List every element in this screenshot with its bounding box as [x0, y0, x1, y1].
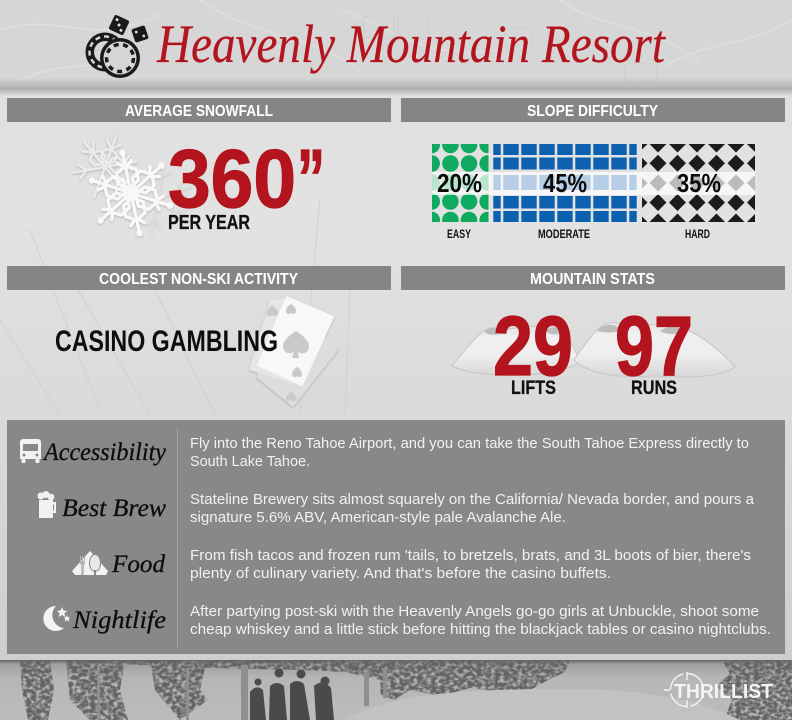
chairlift riders	[250, 668, 334, 720]
heading: coolest non-ski activity	[7, 266, 391, 290]
heading: average snowfall	[7, 98, 391, 122]
row: food	[72, 548, 751, 582]
forest backdrop	[20, 660, 792, 720]
row: nightlife: cheap whiskey and a little stick before hitting the blackjack tables or casino nightclubs.	[190, 622, 771, 638]
heading: slope difficulty	[401, 98, 785, 122]
panel: details	[7, 420, 785, 654]
casino gambling label: CASINO GAMBLING	[55, 325, 278, 358]
icon: casino chips and dice	[86, 14, 149, 78]
header map background	[0, 0, 792, 96]
row: best brew: signature 5.6% ABV, American-style pale Avalanche Ale.	[190, 510, 566, 526]
row: nightlife	[43, 604, 771, 638]
category labels: HARD	[685, 229, 710, 241]
bottom photo strip	[0, 660, 792, 720]
row: accessibility: Accessibility	[42, 439, 167, 466]
translucent percent band	[432, 172, 755, 195]
icon: snowflakes	[65, 126, 198, 245]
mountain stat: lifts: 29	[493, 299, 573, 393]
pattern: moderate blue squares	[493, 144, 637, 222]
logo: Thrillist	[664, 672, 773, 708]
percent labels: 20%	[437, 170, 482, 198]
mountain stat: lifts: LIFTS	[511, 378, 556, 399]
pattern: easy green dots	[432, 144, 488, 222]
icon: place setting	[72, 551, 108, 575]
row: best brew	[38, 491, 755, 526]
snow slope	[343, 689, 740, 720]
snowfall stat: 360	[168, 132, 296, 225]
percent labels: 35%	[677, 170, 721, 198]
pattern: hard black diamonds	[642, 144, 755, 222]
title: Heavenly Mountain Resort	[156, 14, 667, 74]
heading: coolest non-ski activity: COOLEST NON-SKI ACTIVITY	[99, 271, 298, 288]
icon: bus	[20, 439, 41, 463]
category labels: MODERATE	[538, 229, 590, 241]
mountain stat: runs: 97	[615, 299, 693, 393]
row: accessibility	[20, 436, 749, 470]
row: best brew: Best Brew	[62, 495, 166, 522]
row: food: From fish tacos and frozen rum 'tails, to bretzels, brats, and 3L boots of bier, there's	[190, 548, 751, 564]
heading: slope difficulty: SLOPE DIFFICULTY	[527, 103, 658, 120]
row: nightlife: Nightlife	[72, 607, 166, 634]
row: food: Food	[111, 551, 165, 578]
mountain stat: runs: RUNS	[631, 378, 677, 399]
row: accessibility: South Lake Tahoe.	[190, 454, 310, 470]
row: food: plenty of culinary variety. And that's before the casino buffets.	[190, 566, 611, 582]
logo: Thrillist: THRILLIST	[674, 681, 773, 703]
icon: beer mug	[38, 491, 56, 518]
icon: moon and stars	[43, 606, 70, 631]
lift poles	[97, 665, 387, 720]
percent labels	[437, 170, 721, 198]
faint slope lines background	[0, 200, 350, 415]
row: best brew: Stateline Brewery sits almost squarely on the California/ Nevada border, and pours a	[190, 492, 755, 508]
percent labels: 45%	[543, 170, 587, 198]
row: nightlife: After partying post-ski with the Heavenly Angels go-go girls at Unbuckle, shoot some	[190, 604, 759, 620]
category labels: EASY	[447, 229, 471, 241]
category labels	[447, 229, 710, 241]
heading: average snowfall: AVERAGE SNOWFALL	[125, 103, 273, 120]
icon: playing cards	[249, 297, 339, 407]
row: accessibility: Fly into the Reno Tahoe Airport, and you can take the South Tahoe Express directly to	[190, 436, 749, 452]
chart: slope difficulty	[432, 144, 755, 238]
snowfall stat: PER YEAR	[168, 211, 250, 234]
icon: mountains	[452, 322, 735, 377]
heading: mountain stats	[401, 266, 785, 290]
snowfall stat: ”	[297, 132, 325, 225]
heading: mountain stats: MOUNTAIN STATS	[530, 271, 655, 288]
